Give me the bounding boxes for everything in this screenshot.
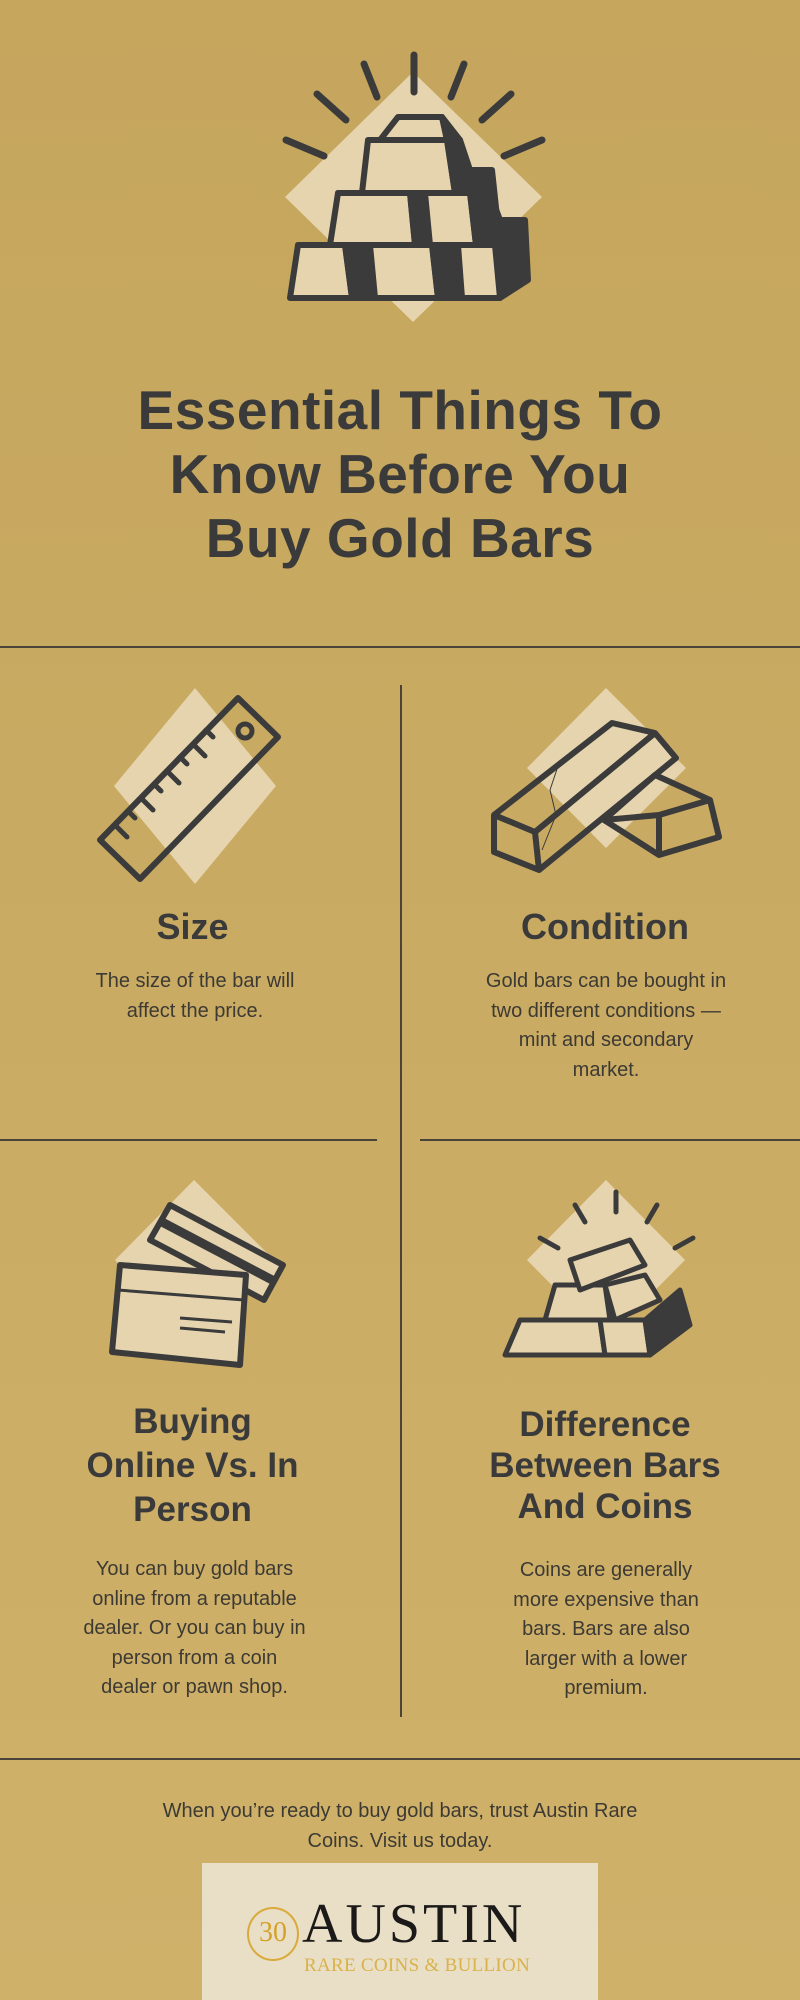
icon: bars stack small — [502, 1180, 696, 1358]
logo — [202, 1863, 598, 2000]
title: Buy Gold Bars — [206, 507, 594, 569]
heading: condition: Condition — [521, 906, 689, 947]
icon: bars condition — [491, 688, 722, 873]
icon: ruler — [97, 688, 281, 884]
footer text: When you’re ready to buy gold bars, trust Austin Rare Coins. Visit us today. — [163, 1800, 637, 1852]
icon: credit cards — [109, 1180, 286, 1368]
heading: difference — [489, 1405, 721, 1526]
text: condition: Gold bars can be bought in two different conditions — mint and secondary market. — [486, 970, 726, 1080]
heading: buying online: Online Vs. In — [86, 1446, 298, 1485]
text: difference: Coins are generally more expensive than bars. Bars are also larger with a lower premium. — [513, 1559, 699, 1699]
title — [138, 379, 662, 569]
text: size: The size of the bar will affect the price. — [96, 970, 294, 1022]
heading: difference: Difference — [519, 1405, 691, 1444]
heading: buying online — [86, 1402, 298, 1529]
heading: difference: And Coins — [518, 1487, 692, 1526]
text: buying: You can buy gold bars online from a reputable dealer. Or you can buy in person from a coin dealer or pawn shop. — [83, 1558, 306, 1698]
logo emblem: 30 — [259, 1917, 287, 1948]
title: Essential Things To — [138, 379, 662, 441]
heading: buying online: Buying — [133, 1402, 252, 1441]
logo emblem — [247, 1907, 299, 1961]
heading: buying online: Person — [133, 1490, 252, 1529]
heading: size: Size — [156, 906, 229, 947]
title: Know Before You — [170, 443, 630, 505]
heading: difference: Between Bars — [489, 1446, 721, 1485]
logo wordmark: AUSTIN — [302, 1893, 525, 1955]
icon: gold bar stack — [282, 52, 546, 322]
logo: RARE COINS & BULLION — [304, 1955, 530, 1976]
